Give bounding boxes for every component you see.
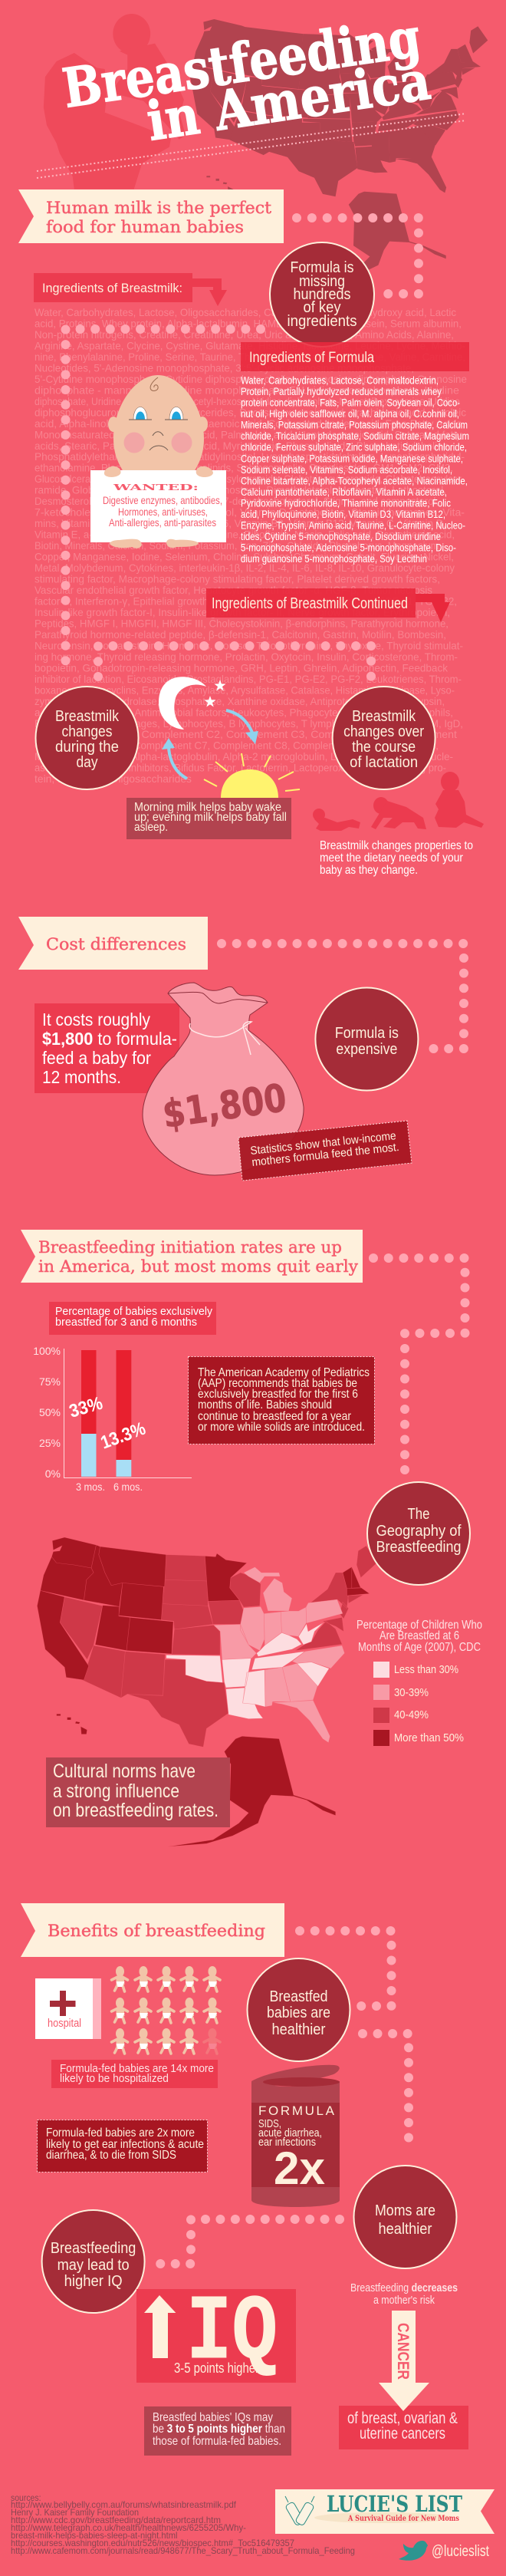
formula ingredients text: 5-monophosphate, Adenosine 5-monophosphate, Diso- xyxy=(241,542,456,554)
ingredients of breastmilk text wall: mins, Vitamin A, Beta carotene, Vitamin B6, Vitamin B8, Vitamin B12, Vitamin C, Vitamin D, xyxy=(34,517,446,529)
callout: morning milk: Morning milk helps baby wake xyxy=(134,801,281,814)
illustration: money bag xyxy=(143,983,304,1175)
label: ingredients of formula xyxy=(241,342,469,371)
callout: IQ explanation: Breastfed babies' IQs may xyxy=(153,2411,273,2424)
caption: breastmilk changes properties: Breastmilk changes properties to xyxy=(320,839,473,852)
formula ingredients text: Sodium selenate, Vitamins, Sodium ascorbate, Inositol, xyxy=(241,463,452,476)
callout: cultural norms: on breastfeeding rates. xyxy=(53,1800,219,1821)
caption: breastmilk changes properties: baby as they change. xyxy=(320,864,418,877)
silhouette: mother holding baby xyxy=(44,14,186,189)
illustration: formula can: SIDS, xyxy=(258,2117,281,2130)
circle: breastmilk changes during the day: day xyxy=(77,754,98,771)
callout: AAP recommendation: or more while solids are introduced. xyxy=(198,1421,365,1434)
callout: cultural norms: Cultural norms have xyxy=(53,1761,196,1782)
ingredients of breastmilk text wall: Desmosterol, Triacylglycerol, Cholesterol, 7-dehydrocholesterol, Stigma- and campesterol, xyxy=(34,495,439,507)
callout: AAP recommendation: The American Academy of Pediatrics xyxy=(198,1366,370,1379)
illustration: baby with wanted sign: Digestive enzymes, antibodies, xyxy=(103,494,222,506)
ingredients of breastmilk text wall xyxy=(34,306,467,785)
sources: Henry J. Kaiser Family Foundation xyxy=(11,2507,139,2518)
label: ingredients of breastmilk xyxy=(34,273,227,306)
dotted connector: initiation banner to geography circle xyxy=(373,1258,465,1472)
heading banner: cost differences xyxy=(18,917,208,970)
circle: breastmilk changes over lactation xyxy=(333,687,435,789)
callout: AAP recommendation xyxy=(189,1356,374,1444)
title xyxy=(58,5,434,153)
pictogram: 14 of 15 babies xyxy=(112,1966,220,2054)
legend: percentage of children breastfed: 40-49% xyxy=(394,1708,429,1721)
ingredients of breastmilk text wall: Water, Carbohydrates, Lactose, Oligosaccharides, Carboxylic acid, Alpha hydroxy acid, Lactic xyxy=(34,306,456,318)
ingredients of breastmilk text wall: boxanes, Prostacyclins, Enzymes, Amylase, Arysulfatase, Catalase, Histaminase, Lipase, Lyso- xyxy=(34,684,455,696)
callout: 2x ear infections: Formula-fed babies are 2x more xyxy=(46,2126,195,2140)
ingredients of breastmilk text wall: acid, Proteins, Whey protein, Alpha-lactalbumin, HAMLET, Lactoferrin, Casein, Serum albumin, xyxy=(34,318,462,330)
label: ingredients of formula: Ingredients of Formula xyxy=(249,350,374,366)
formula ingredients text: acid, Phylloquinone, Biotin, Vitamin D3, Vitamin B12, xyxy=(241,508,445,520)
caption: breastmilk changes properties: meet the dietary needs of your xyxy=(320,852,464,865)
formula ingredients text: dium guanosine 5-monophosphate, Soy Lecithin xyxy=(241,552,427,565)
legend: percentage of children breastfed: 30-39% xyxy=(394,1686,429,1699)
ingredients of breastmilk text wall: Mucins, Haptocorrin, Alpha-lactoglobulin, Alpha-2 macroglobulin, Lewis antigens, Ribonucle- xyxy=(34,750,453,763)
illustration: baby with wanted sign: Hormones, anti-viruses, xyxy=(118,506,208,518)
callout: AAP recommendation: (AAP) recommends that babies be xyxy=(198,1377,357,1390)
formula ingredients text xyxy=(241,374,469,565)
bar chart: exclusive breastfeeding: 75% xyxy=(39,1375,61,1388)
circle: breastmilk changes during the day: during the xyxy=(55,739,119,756)
circle: breastfed babies are healthier xyxy=(247,1958,350,2061)
dotted connector: cost banner to formula circle xyxy=(222,944,464,1049)
illustration: formula can: acute diarrhea, xyxy=(258,2126,322,2140)
circle: moms are healthier: Moms are xyxy=(375,2202,435,2219)
ingredients of breastmilk text wall: ramide, Globoside, Sterols, Squalene, Lanosterol, Dimethylsterol, Methostrol, Lathosterol, xyxy=(34,484,446,496)
heading banner: initiation rates: in America, but most moms quit early xyxy=(38,1257,358,1276)
callout: 14x more likely hospitalized xyxy=(51,2060,218,2088)
map: United States silhouette xyxy=(190,19,488,285)
map: breastfeeding rates by state xyxy=(37,1537,377,1846)
panel: cancers callout xyxy=(339,2406,468,2449)
bar chart: exclusive breastfeeding: 100% xyxy=(33,1345,61,1357)
circle: geography of breastfeeding: Geography of xyxy=(376,1523,462,1540)
illustration: formula can: ear infections xyxy=(258,2136,316,2149)
circle: breastfeeding may lead to higher IQ xyxy=(42,2210,145,2313)
callout: cost of formula: It costs roughly xyxy=(42,1010,150,1029)
legend: percentage of children breastfed: Percentage of Children Who xyxy=(356,1619,482,1632)
sources: http://www.bellybelly.com.au/forums/whatsinbreastmilk.pdf xyxy=(11,2499,237,2510)
heading banner: cost differences: Cost differences xyxy=(46,935,186,954)
callout: 14x more likely hospitalized: likely to be hospitalized xyxy=(60,2072,169,2085)
ingredients of breastmilk text wall: Vascular endothelial growth factor, Hepatocyte growth factor -α, HGF-β, Tumor necrosis xyxy=(34,584,432,596)
ingredients of breastmilk text wall: Nucleotides, 5'-Adenosine monophosphate, 3':5'-Cyclic adenosine monophosphate, xyxy=(34,361,414,374)
formula ingredients text: tides, Cytidine 5-monophosphate, Disodium uridine xyxy=(241,530,441,542)
circle: geography of breastfeeding xyxy=(367,1482,470,1585)
ingredients of breastmilk text wall: Copper, Manganese, Iodine, Selenium, Choline, Sulpher, Chromium, Cobalt, Fluorine, Nickel, xyxy=(34,551,454,563)
ingredients of breastmilk text wall: Metal, Molybdenum, Cytokines, interleukin-1β, IL-2, IL-4, IL-6, IL-8, IL-10, Granulocyte-colony xyxy=(34,562,455,574)
circle: breastfed babies are healthier: Breastfed xyxy=(270,1988,328,2005)
bar chart: exclusive breastfeeding: 6 mos. xyxy=(113,1481,143,1493)
callout: cost of formula: $1,800 to formula- xyxy=(42,1029,177,1049)
dotted connector: moms to IQ xyxy=(160,2219,340,2264)
bar chart: exclusive breastfeeding: 50% xyxy=(39,1406,61,1418)
ingredients of breastmilk text wall: acids, Stearic, Palmitic acid, Lauric acid, Myristic acid, Phospholipids, Phosphatidylcholine, xyxy=(34,440,452,452)
circle: breastfed babies are healthier: babies are xyxy=(267,2004,330,2021)
callout: morning milk: up; evening milk helps baby fall xyxy=(134,811,287,824)
ingredients of breastmilk text wall: ase, Haemagglutinin inhibitors, Bifidus Factor, Lactoferrin, Lactoperoxidase, B12 binding pro- xyxy=(34,762,446,774)
icon: hospital: hospital xyxy=(48,2017,81,2030)
callout: cultural norms xyxy=(46,1757,230,1827)
illustration: money bag: $1,800 xyxy=(160,1076,289,1137)
sources: http://courses.washington.edu/nutr526/news/biospec.htm#_Toc516479357 xyxy=(11,2538,294,2548)
text: breastfeeding decreases risk xyxy=(350,2281,458,2307)
callout: AAP recommendation: continue to breastfeed for a year xyxy=(198,1410,352,1423)
panel: higher IQ: 3-5 points higher xyxy=(174,2360,259,2376)
circle: breastmilk changes during the day: changes xyxy=(61,723,112,740)
label: chart title xyxy=(49,1302,216,1335)
illustration: baby with wanted sign: Anti-allergies, anti-parasites xyxy=(109,516,216,529)
sources: sources: xyxy=(11,2492,41,2503)
circle: geography of breastfeeding: Breastfeeding xyxy=(376,1539,462,1556)
ingredients of breastmilk text wall: Biotin, Minerals, Calcium, Sodium, Potassium, Iron, Zinc, Chloride, Phosphorus, Magnesium, xyxy=(34,539,442,552)
label: chart title: Percentage of babies exclusively xyxy=(55,1305,212,1318)
caption: breastmilk changes properties xyxy=(320,839,473,877)
illustration: baby with wanted sign: WANTED: xyxy=(112,483,199,492)
legend: percentage of children breastfed: Less than 30% xyxy=(394,1663,458,1676)
ingredients of breastmilk text wall: a-1-antichymotrypsin, Antimicrobial factors, Leukocytes, Phagocytes, Basophils, Neutrophils, xyxy=(34,706,453,718)
circle: formula is missing ingredients: Formula is xyxy=(290,259,354,276)
heading banner: initiation rates: Breastfeeding initiation rates are up xyxy=(38,1238,342,1257)
callout: cost of formula: feed a baby for xyxy=(42,1048,151,1068)
illustration: baby with wanted sign xyxy=(90,375,226,548)
ingredients of breastmilk text wall: nine, Phenylalanine, Proline, Serine, Taurine, Threonine, Tryptophan, Tyrosine, Valine, Carnitine, xyxy=(34,351,465,363)
callout: IQ explanation: those of formula-fed babies. xyxy=(153,2435,281,2448)
circle: formula is missing ingredients: hundreds xyxy=(293,286,351,303)
ingredients of breastmilk text wall: Non-protein nitrogens, Creatine, Creatinine, Urea, Uric acid, Peptides, Amino Acids, Alanine, xyxy=(34,328,454,341)
ingredients of breastmilk text wall: diphosphate, Uridine diphosphate-N-acetyl-hexose, Uridine diphosphate-N-acetylhexosamine, Uridine xyxy=(34,395,460,407)
panel: higher IQ: IQ xyxy=(186,2281,278,2386)
icon: day cycle arrows xyxy=(162,710,258,779)
circle: formula is missing ingredients: ingredients xyxy=(287,313,357,330)
callout: statistics on low income mothers: Statistics show that low-income xyxy=(250,1129,396,1158)
ingredients of breastmilk text wall: Peptides, HMGF I, HMGFII, HMGF III, Cholecystokinin, β-endorphins, Parathyroid hormone, xyxy=(34,617,449,629)
arrow: cancer: CANCER xyxy=(394,2323,412,2380)
callout: IQ explanation: be 3 to 5 points higher than xyxy=(153,2423,285,2436)
logo: Lucie's List banner xyxy=(275,2489,495,2534)
panel: higher IQ xyxy=(136,2281,296,2386)
ingredients of breastmilk text wall: Glucosylceramide, Glycosphingolipids, Lactosylceramide, Globotriaosylceramide, Globotetraosylcer- xyxy=(34,473,465,485)
legend: percentage of children breastfed: More than 50% xyxy=(394,1731,464,1744)
sources: http://www.cafemom.com/journals/read/948677/The_Scary_Truth_about_Formula_Feeding xyxy=(11,2545,355,2556)
circle: formula is missing ingredients: missing xyxy=(299,273,345,290)
ingredients of breastmilk text wall: Arginine, Aspartate, Clycine, Cystine, Glutamate, Histidine, Isoleucine, Leucine, Lycine, Methio- xyxy=(34,339,465,351)
decorative title rules xyxy=(37,114,466,178)
formula ingredients text: Water, Carbohydrates, Lactose, Corn maltodextrin, xyxy=(241,374,439,387)
formula ingredients text: Calcium pantothenate, Riboflavin, Vitamin A acetate, xyxy=(241,486,447,498)
bar chart: exclusive breastfeeding: 0% xyxy=(45,1468,61,1480)
bar chart: exclusive breastfeeding xyxy=(33,1345,192,1493)
text: breastfeeding decreases risk: a mother's risk xyxy=(373,2294,435,2307)
bar chart: exclusive breastfeeding: 3 mos. xyxy=(76,1481,105,1493)
ingredients of breastmilk text wall: C5, Complement C6, Complement C7, Complement C8, Complement C9, Glycoproteins, xyxy=(34,740,439,752)
ingredients of breastmilk text wall: Insulin-like growth factor-I, Insulin-like growth factor- II, Nerve growth factor, Erythropoietin, xyxy=(34,606,450,618)
ingredients of breastmilk text wall: stimulating factor, Macrophage-colony stimulating factor, Platelet derived growth factors, xyxy=(34,572,440,585)
formula ingredients text: protein concentrate, Fats, Palm olein, Soybean oil, Coco- xyxy=(241,397,460,409)
label: ingredients of breastmilk continued: Ingredients of Breastmilk Continued xyxy=(212,595,408,612)
circle: formula is expensive: expensive xyxy=(336,1041,397,1058)
panel: cancers callout: of breast, ovarian & xyxy=(347,2410,458,2427)
callout: statistics on low income mothers xyxy=(238,1121,412,1181)
circle: formula is expensive xyxy=(315,988,418,1091)
ingredients of breastmilk text wall: Neurotensin, Somatostatin, Hormones, Cortisol, Triiodothyronine, Thyroxine, Thyroid stimulat- xyxy=(34,639,463,651)
circle: breastmilk changes over lactation: the course xyxy=(352,739,416,756)
ingredients of breastmilk text wall: Monounsaturated fatty acids, Oleic acid, Palmitoleic acid, Heptadecenoic acid, Saturated fatty xyxy=(34,428,462,440)
sources: http://www.telegraph.co.uk/health/healthnews/6255205/Why- xyxy=(11,2522,246,2533)
heading banner: human milk: food for human babies xyxy=(46,218,244,236)
circle: breastmilk changes over lactation: changes over xyxy=(343,723,424,740)
circle: geography of breastfeeding: The xyxy=(408,1506,429,1523)
circle: formula is expensive: Formula is xyxy=(335,1025,399,1042)
twitter handle: @lucieslist xyxy=(432,2543,489,2560)
callout: cost of formula: 12 months. xyxy=(42,1067,121,1087)
ingredients of breastmilk text wall: diphosphate - mannose, 3'-Uridine monophosphate, 5'-Uridine monophosphate, Uridine xyxy=(34,384,459,396)
logo: Lucie's List banner: A Survival Guide for New Moms xyxy=(347,2515,459,2523)
ingredients of breastmilk text wall: ethanolamine, Plasmalogens, Sphingolipids, Sphingomyelin, Gangliosides, GM1, GM2, GM3, xyxy=(34,462,453,474)
illustration: formula can: 2x xyxy=(274,2143,325,2194)
ingredients of breastmilk text wall: IgE, Complement C1, Complement C2, Complement C3, Complement C4, Complement xyxy=(34,728,457,740)
legend: percentage of children breastfed: Are Breastfed at 6 xyxy=(380,1629,459,1642)
formula ingredients text: Protein, Partially hydrolyzed reduced minerals whey xyxy=(241,385,442,397)
panel: cancers callout: uterine cancers xyxy=(360,2425,445,2443)
callout: statistics on low income mothers: mothers formula feed the most. xyxy=(251,1141,399,1169)
formula ingredients text: nut oil, High oleic safflower oil, M. alpina oil, C.cohnii oil, xyxy=(241,407,459,420)
circle: breastmilk changes over lactation: of lactation xyxy=(350,754,418,771)
label: ingredients of breastmilk continued xyxy=(206,588,450,622)
circle: breastfeeding may lead to higher IQ: Breastfeeding xyxy=(51,2240,136,2257)
ingredients of breastmilk text wall: ing hormone, Thyroid releasing hormone, Prolactin, Oxytocin, Insulin, Corticosterone, Throm- xyxy=(34,651,458,663)
icon: growing baby silhouettes xyxy=(313,772,484,831)
icon: moon and stars xyxy=(159,677,226,730)
circle: moms are healthier xyxy=(354,2166,457,2268)
circle: formula is missing ingredients xyxy=(270,242,374,347)
text: breastfeeding decreases risk: Breastfeeding decreases xyxy=(350,2281,458,2294)
dotted connector: branch across xyxy=(98,646,371,677)
icon: rising sun xyxy=(204,753,300,798)
circle: breastmilk changes during the day xyxy=(35,687,138,789)
ingredients of breastmilk text wall: tein, Fatty Acid, Oligosaccharides xyxy=(34,772,192,785)
circle: formula is missing ingredients: of key xyxy=(304,299,340,316)
ingredients of breastmilk text wall: Parathyroid hormone-related peptide, β-defensin-1, Calcitonin, Gastrin, Motilin, Bombesin, xyxy=(34,628,446,641)
callout: 2x ear infections: diarrhea, & to die from SIDS xyxy=(46,2149,176,2162)
sources: breast-milk-helps-babies-sleep-at-night.html xyxy=(11,2530,178,2541)
callout: cultural norms: a strong influence xyxy=(53,1780,179,1802)
formula ingredients text: Pyridoxine hydrochloride, Thiamine mononitrate, Folic xyxy=(241,497,451,509)
label: ingredients of breastmilk: Ingredients of Breastmilk: xyxy=(42,281,182,295)
heading banner: human milk xyxy=(18,189,284,243)
callout: AAP recommendation: exclusively breastfed for the first 6 xyxy=(198,1388,358,1401)
circle: moms are healthier: healthier xyxy=(379,2221,432,2238)
ingredients of breastmilk text wall: Phosphatidylethanolamine, Phosphatidylinositol, Lysophosphatidylcholine, Lysophosphatidyl- xyxy=(34,450,465,463)
circle: breastfed babies are healthier: healthier xyxy=(271,2021,326,2038)
illustration: formula can: FORMULA xyxy=(258,2103,335,2118)
title: in America xyxy=(143,48,434,153)
sources xyxy=(11,2492,355,2556)
ingredients of breastmilk text wall: factor-α, Interferon-γ, Epithelial growth factor, Transforming growth factor-α, TGF β1, TGF-β2, xyxy=(34,595,457,608)
ingredients of breastmilk text wall: zyme, PAF-acetylhydrolase, Phosphatase, Xanthine oxidase, Antiproteases, a-1-antitrypsin, xyxy=(34,695,445,707)
bar chart: exclusive breastfeeding: 25% xyxy=(39,1437,61,1449)
label: chart title: breastfed for 3 and 6 months xyxy=(55,1316,197,1329)
callout: 14x more likely hospitalized: Formula-fed babies are 14x more xyxy=(60,2062,214,2075)
ingredients of breastmilk text wall: Vitamin E, a-Tocopherol, Vitamin K, Thiamine, Riboflavin, Niacin, Folic acid, Pantothenic acid, xyxy=(34,529,455,541)
legend: percentage of children breastfed xyxy=(356,1619,482,1746)
heading banner: initiation rates xyxy=(21,1230,363,1283)
ingredients of breastmilk text wall: 5'-Cytidine monophosphate, Cytidine diphosphate choline, Guanosine diphosphate, Guanosine xyxy=(34,373,467,385)
callout: IQ explanation xyxy=(144,2406,291,2456)
logo: Lucie's List banner: LUCIE'S LIST xyxy=(327,2491,462,2517)
icon: hospital xyxy=(35,1978,101,2039)
legend: percentage of children breastfed: Months of Age (2007), CDC xyxy=(358,1641,481,1654)
callout: 2x ear infections xyxy=(37,2120,207,2172)
callout: AAP recommendation: months of life. Babies should xyxy=(198,1398,332,1412)
ingredients of breastmilk text wall: diphosphoglucuronate, Lipids, Triglycerides, Docosahexaenoic acid, Arachidonic acid, Linoleic xyxy=(34,406,466,418)
circle: breastmilk changes during the day: Breastmilk xyxy=(55,708,120,725)
ingredients of breastmilk text wall: acid, Alpha-linolenic acid, Eicosapentaenoic acid, Conjugated linoleic acid, Free Fatty Acids, xyxy=(34,417,465,430)
icon: twitter bird xyxy=(399,2541,428,2561)
ingredients of breastmilk text wall: Eoisinophils, Macrophages, Lymphocytes, B lymphocytes, T lymphocytes, sIgA, IgG, IgM, IgD, xyxy=(34,717,463,730)
callout: cost of formula xyxy=(34,1003,179,1093)
callout: morning milk xyxy=(127,798,291,839)
heading banner: human milk: Human milk is the perfect xyxy=(46,199,272,217)
ingredients of breastmilk text wall: inhibitor of lactation, Eicosanoids, Prostaglandins, PG-E1, PG-E2, PG-F2, Leukotrienes, Throm- xyxy=(34,673,462,685)
circle: breastfeeding may lead to higher IQ: higher IQ xyxy=(64,2273,123,2290)
dotted connector: formula circle to day and lactation circles xyxy=(66,329,261,675)
ingredients of breastmilk text wall: bopoietin, Gonadotropin-releasing hormone, GRH, Leptin, Ghrelin, Adiponectin, Feedback xyxy=(34,661,449,674)
ingredients of breastmilk text wall: 7-ketocholesterol, Sitosterol, β-lathosterol, Vitamin D metabolites, Steroid hormones, Vita- xyxy=(34,506,465,519)
circle: breastfeeding may lead to higher IQ: may lead to xyxy=(58,2257,130,2274)
illustration: formula can xyxy=(251,2065,340,2207)
circle: breastmilk changes over lactation: Breastmilk xyxy=(352,708,416,725)
heading banner: benefits xyxy=(21,1903,284,1957)
sources: http://www.cdc.gov/breastfeeding/data/reportcard.htm xyxy=(11,2515,221,2525)
dotted connector: healthier babies to moms xyxy=(363,2034,409,2153)
dotted connector: banner to formula circle xyxy=(297,218,419,294)
arrow: cancer xyxy=(379,2311,429,2411)
bar chart: exclusive breastfeeding: 13.3% xyxy=(98,1418,148,1454)
callout: 2x ear infections: likely to get ear infections & acute xyxy=(46,2138,204,2151)
callout: morning milk: asleep. xyxy=(134,821,168,834)
dotted connector: benefits banner to healthier babies xyxy=(300,1931,391,2006)
heading banner: benefits: Benefits of breastfeeding xyxy=(48,1922,265,1940)
bar chart: exclusive breastfeeding: 33% xyxy=(67,1393,105,1422)
